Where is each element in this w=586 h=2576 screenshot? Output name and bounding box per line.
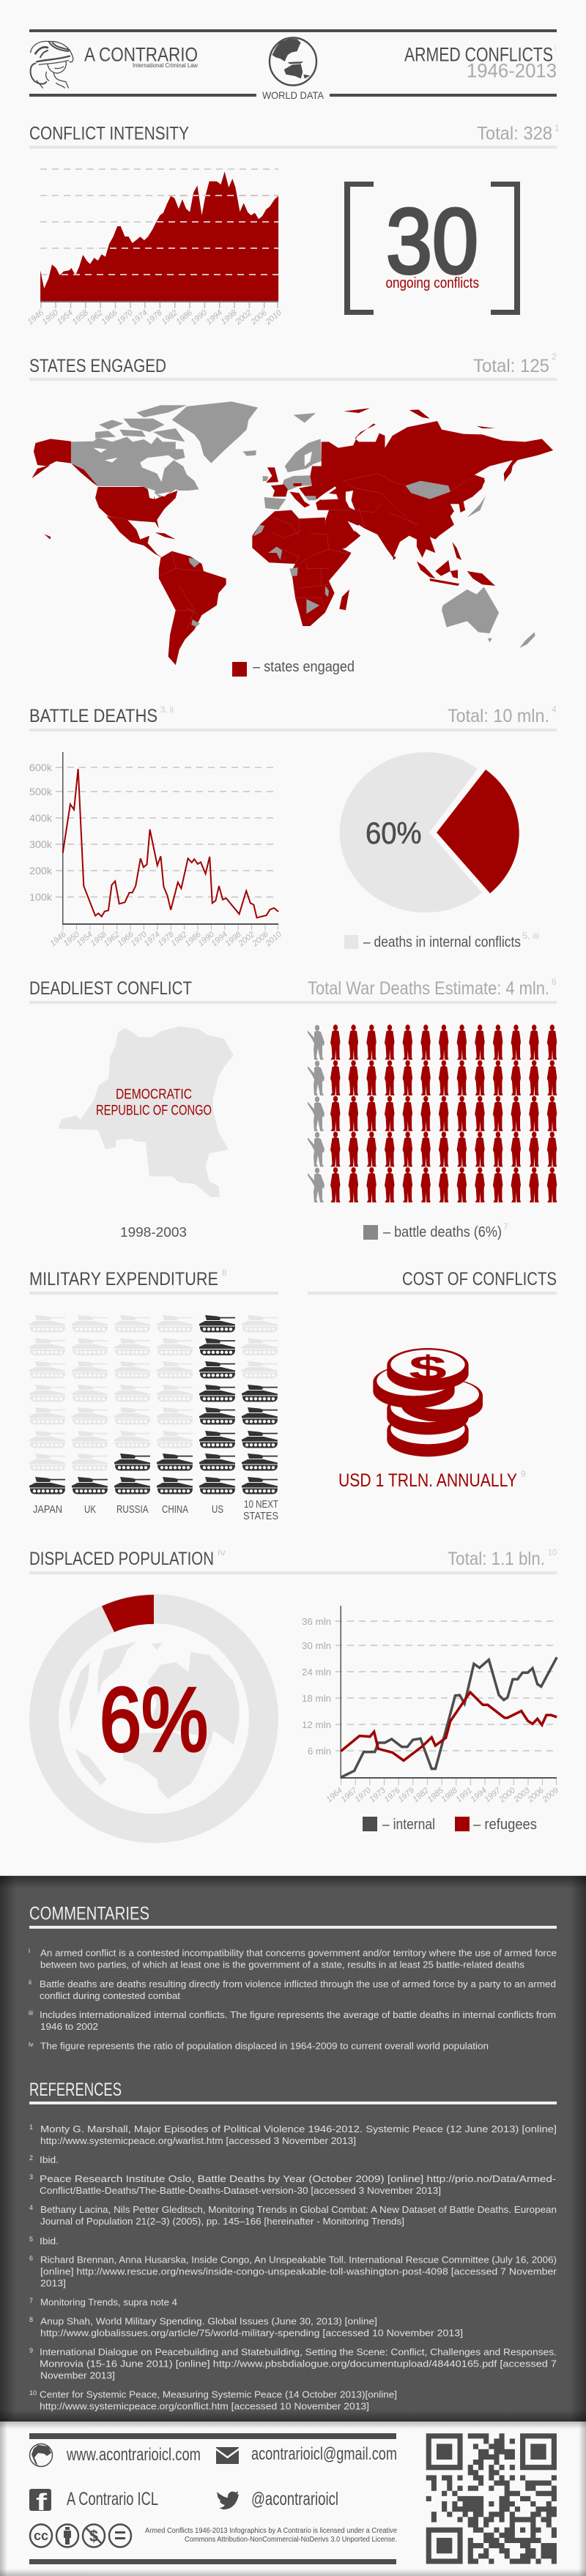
panel: deadliest conflict [29,977,557,1240]
bracketed count [344,182,520,315]
map: DR Congo: REPUBLIC OF CONGO [96,1103,212,1119]
map label: DEMOCRATIC [116,1087,192,1103]
reference 10 [29,2389,397,2412]
reference 1 [29,2123,557,2146]
logo subtitle: International Criminal Law [133,62,198,69]
years: 1998-2003 [120,1225,187,1240]
pie chart [340,752,519,912]
reference 4 [29,2204,557,2227]
reference 6: Richard Brennan, Anna Husarska, Inside Congo, An Unspeakable Toll. International Rescue Committee (July 16, 2006) [40,2255,557,2266]
line chart: displaced: 1997 [483,1786,503,1804]
QR code [426,2433,557,2564]
icon: envelope [215,2447,240,2464]
reference 5: Ibid. [40,2236,59,2246]
panel: conflict intensity [26,123,560,327]
line chart: displaced: 1985 [426,1786,446,1804]
country labels: US [212,1503,223,1516]
website: www.acontrarioicl.com [66,2445,201,2465]
icon: blindfolded justice face [31,41,73,88]
line chart: displaced: 1964 [324,1786,344,1804]
heading: REFERENCES [29,2080,122,2100]
total: Total War Deaths Estimate: 4 mln. [308,978,549,999]
reference 6: [online] http://www.rescue.org/news/inside-congo-unspeakable-toll-washington-post-4098 [accessed 7 November [40,2266,557,2277]
area chart: 1958 [70,308,91,327]
legend: states engaged: – states engaged [253,659,355,675]
license text [145,2527,397,2544]
reference 8: Anup Shah, World Military Spending. Global Issues (June 30, 2013) [online] [40,2316,377,2327]
panel: battle deaths [29,704,557,950]
legend: internal conflicts: – deaths in internal conflicts [363,934,521,950]
donut value: 6% [100,1670,208,1771]
commentary iv: The figure represents the ratio of population displaced in 1964-2009 to current overall world population [40,2041,489,2052]
line chart: displaced: 12 mln [302,1719,331,1730]
reference 1: 1 [29,2123,33,2131]
reference 10: http://www.systemicpeace.org/conflict.htm [accessed 10 November 2013] [40,2401,369,2412]
reference 2 [29,2154,59,2165]
line chart: 1946 [48,930,69,948]
heading: COMMENTARIES [29,1904,149,1924]
icons: creative commons: $ [89,2527,98,2545]
panel: commentaries [29,1904,557,2052]
line chart: displaced: 2009 [541,1786,560,1805]
country labels: JAPAN [33,1503,62,1516]
line chart: displaced: 1988 [440,1786,460,1804]
total: Total: 125 [473,356,549,376]
icon: globe [270,38,316,85]
reference 8: 8 [29,2316,33,2323]
reference 8 [29,2316,463,2339]
line chart: displaced: 1967 [339,1786,360,1804]
area chart: 1998 [219,308,240,327]
line chart: displaced: 6 mln [308,1746,331,1757]
line chart: 2002 [237,930,256,949]
country labels: STATES [243,1510,278,1522]
line chart: displaced: 1991 [454,1786,474,1804]
line chart: displaced [302,1606,560,1805]
icons: creative commons: cc [34,2528,48,2543]
footnote: 2 [552,351,557,362]
line chart: displaced: 1976 [382,1786,403,1804]
panel: military expenditure [29,1267,278,1522]
reference 3: Peace Research Institute Oslo, Battle Deaths by Year (October 2009) [online] http://prio.no/Data/Armed- [40,2173,556,2184]
commentary iii: 1946 to 2002 [40,2021,98,2032]
pie value: 60% [366,816,422,850]
area chart: 1946 [26,308,46,327]
line chart: 1966 [116,930,136,948]
reference 9: November 2013] [40,2370,115,2381]
reference 3 [29,2173,556,2196]
license text: Armed Conflicts 1946-2013 Infographics by A Contrario is licensed under a Creative [145,2527,397,2535]
icons: creative commons [30,2525,131,2547]
area chart: 2002 [234,308,253,327]
line chart: 1954 [75,930,94,948]
country labels: RUSSIA [116,1503,148,1516]
line chart: 1990 [196,930,217,948]
reference 9: 9 [29,2347,33,2354]
line chart: displaced: 2003 [512,1786,533,1805]
line chart: 1982 [169,930,189,948]
caption: ongoing conflicts [385,275,479,291]
map: DR Congo [58,1027,234,1197]
total: Total: 10 mln. [448,706,549,726]
footnote: 8 [222,1267,227,1278]
panel: dark notes background [0,1875,586,2421]
logo text: A CONTRARIO [84,43,198,65]
line chart: displaced: 1973 [368,1786,388,1804]
line chart: displaced: 1979 [396,1786,416,1804]
line chart: 1950 [62,930,82,948]
line chart [29,752,284,949]
cost figure: USD 1 TRLN. ANNUALLY [338,1470,517,1491]
reference 5: 5 [29,2236,33,2243]
commentary i: i [29,1947,30,1954]
line chart: displaced: 2000 [497,1786,518,1805]
line chart: 1994 [209,930,229,948]
reference 10: Center for Systemic Peace, Measuring Systemic Peace (14 October 2013)[online] [40,2389,397,2400]
footnote: 6 [552,977,557,987]
commentary ii: Battle deaths are deaths resulting directly from violence inflicted through the use of armed force by a party to an armed [40,1978,556,1989]
legend: battle deaths: 7 [503,1221,508,1232]
line chart: displaced: 1970 [353,1786,374,1804]
reference 9: Monrovia (15-16 June 2011) [online] http://www.pbsbdialogue.org/documentupload/48440165.pdf [accessed 7 [40,2359,557,2370]
line chart: 1958 [89,930,109,948]
legend: internal conflicts: 5, iii [522,931,539,941]
country labels: 10 NEXT [244,1498,278,1511]
icon: twitter [217,2491,239,2509]
commentary iii [29,2009,556,2032]
panel: footer [0,2421,586,2576]
area chart: 1990 [189,308,209,327]
commentary ii: conflict during contested combat [40,1990,180,2001]
line chart: 2006 [251,930,271,949]
panel: states engaged [29,351,557,677]
reference 5 [29,2236,59,2246]
reference 7: Monitoring Trends, supra note 4 [40,2297,177,2308]
line chart: 1986 [183,930,204,948]
reference 6 [29,2255,557,2289]
reference 6: 6 [29,2255,33,2262]
commentary ii [29,1978,556,2001]
reference 7: 7 [29,2297,33,2304]
icon: globe small [29,2444,53,2466]
line chart: displaced: 1994 [469,1786,489,1804]
area chart: 1974 [130,308,149,327]
commentary iii: iii [29,2009,33,2017]
footnote: 1 [555,123,560,133]
legend: internal and refugees: – refugees [473,1817,537,1833]
reference 9 [29,2347,557,2381]
title footnote: i [555,45,556,53]
heading: BATTLE DEATHS [29,706,157,726]
line chart: displaced: 2006 [526,1786,546,1805]
line chart: 200k [29,865,53,876]
reference 2: Ibid. [40,2154,59,2165]
total: Total: 1.1 bln. [448,1549,545,1569]
area chart: 1962 [85,308,105,327]
line chart: displaced: 18 mln [302,1693,331,1704]
reference 2: 2 [29,2154,33,2162]
country labels [33,1498,278,1522]
reference 6: 2013] [40,2278,66,2289]
icon: coins [373,1348,483,1456]
commentary iii: Includes internationalized internal conflicts. The figure represents the average of battle deaths in internal conflicts from [40,2009,556,2020]
email: acontrarioicl@gmail.com [251,2444,397,2464]
commentary i [29,1947,557,1970]
country labels: CHINA [162,1503,188,1516]
heading: STATES ENGAGED [29,356,166,376]
heading: MILITARY EXPENDITURE [29,1269,218,1289]
footnote: 3, ii [160,704,174,715]
number: 30 [386,190,478,293]
world data label: WORLD DATA [262,89,324,101]
twitter handle: @acontrarioicl [251,2489,338,2509]
line chart: displaced: 36 mln [302,1616,331,1627]
line chart: displaced: 24 mln [302,1667,331,1678]
reference 10: 10 [29,2389,37,2397]
area chart: 1966 [100,308,120,327]
area chart: 1994 [204,308,224,327]
legend: internal and refugees: – internal [382,1817,435,1833]
reference 8: http://www.globalissues.org/article/75/world-military-spending [accessed 10 November 2013] [40,2328,463,2339]
line chart: 600k [29,762,53,773]
reference 4: Journal of Population 21(2–3) (2005), pp. 145–166 [hereinafter - Monitoring Trends] [40,2216,404,2227]
line chart: 2010 [264,930,284,949]
pictogram: tanks [29,1315,278,1494]
legend: internal and refugees [363,1817,537,1833]
license text: Commons Attribution-NonCommercial-NoDerivs 3.0 Unported License. [185,2536,397,2544]
line chart: 1962 [102,930,122,948]
panel: cost of conflicts [308,1269,557,1491]
heading: CONFLICT INTENSITY [29,123,189,144]
pictogram: people [308,1024,557,1202]
line chart: 1974 [142,930,162,948]
title dates: 1946-2013 [467,60,557,82]
commentary ii: ii [29,1978,31,1986]
reference 3: 3 [29,2173,33,2181]
reference 4: 4 [29,2204,33,2211]
area chart: 1978 [144,308,165,327]
heading: DISPLACED POPULATION [29,1549,214,1569]
line chart: 1970 [129,930,149,948]
line chart: displaced: 1982 [411,1786,431,1804]
legend: battle deaths: – battle deaths (6%) [383,1224,502,1240]
area chart: 1950 [40,308,61,327]
line chart: 1998 [223,930,244,948]
heading: DEADLIEST CONFLICT [29,978,192,999]
header [29,29,557,101]
footnote: iv [218,1547,226,1557]
footnote: 9 [521,1469,526,1479]
area chart: 1982 [160,308,179,327]
reference 9: International Dialogue on Peacebuilding and Statebuilding, Setting the Scene: Conflict, Challenges and Responses. [40,2347,557,2358]
total: Total: 328 [477,123,552,144]
line chart: 100k [29,891,53,903]
reference 4: Bethany Lacina, Nils Petter Gleditsch, Monitoring Trends in Global Combat: A New Dataset of Battle Deaths. European [40,2204,557,2215]
line chart: displaced: 30 mln [302,1640,331,1651]
reference 3: Conflict/Battle-Deaths/The-Battle-Deaths-Dataset-version-30 [accessed 3 November 2013] [40,2185,441,2196]
footnote: 10 [548,1547,557,1557]
area chart: 1986 [174,308,195,327]
reference 1: Monty G. Marshall, Major Episodes of Political Violence 1946-2012. Systemic Peace (12 June 2013) [online] [40,2123,557,2134]
area chart: 1970 [115,308,136,327]
icon: facebook [29,2489,51,2515]
line chart: 300k [29,838,53,850]
facebook name: A Contrario ICL [67,2489,158,2509]
line chart: 500k [29,786,53,797]
commentary i: An armed conflict is a contested incompatibility that concerns government and/or territory where the use of armed force [40,1948,557,1959]
icon: facebook: f [36,2489,47,2515]
footnote: 4 [552,704,557,715]
area chart: 2006 [249,308,270,327]
line chart: 1978 [156,930,177,948]
area chart: 1954 [55,308,75,327]
line chart: 400k [29,812,53,824]
icon: coins: $ [409,1349,447,1387]
commentary i: between two parties, of which at least one is the government of a state, results in at least 25 battle-related deaths [40,1959,525,1970]
panel: displaced population [29,1547,560,1843]
donut with globe [29,1594,278,1843]
world map [31,401,553,665]
country labels: UK [84,1503,96,1516]
area chart [26,169,284,327]
area chart: 2010 [264,308,284,327]
reference 1: http://www.systemicpeace.org/warlist.htm [accessed 3 November 2013] [40,2135,356,2146]
commentary iv: iv [29,2041,34,2048]
panel: references [29,2080,557,2412]
